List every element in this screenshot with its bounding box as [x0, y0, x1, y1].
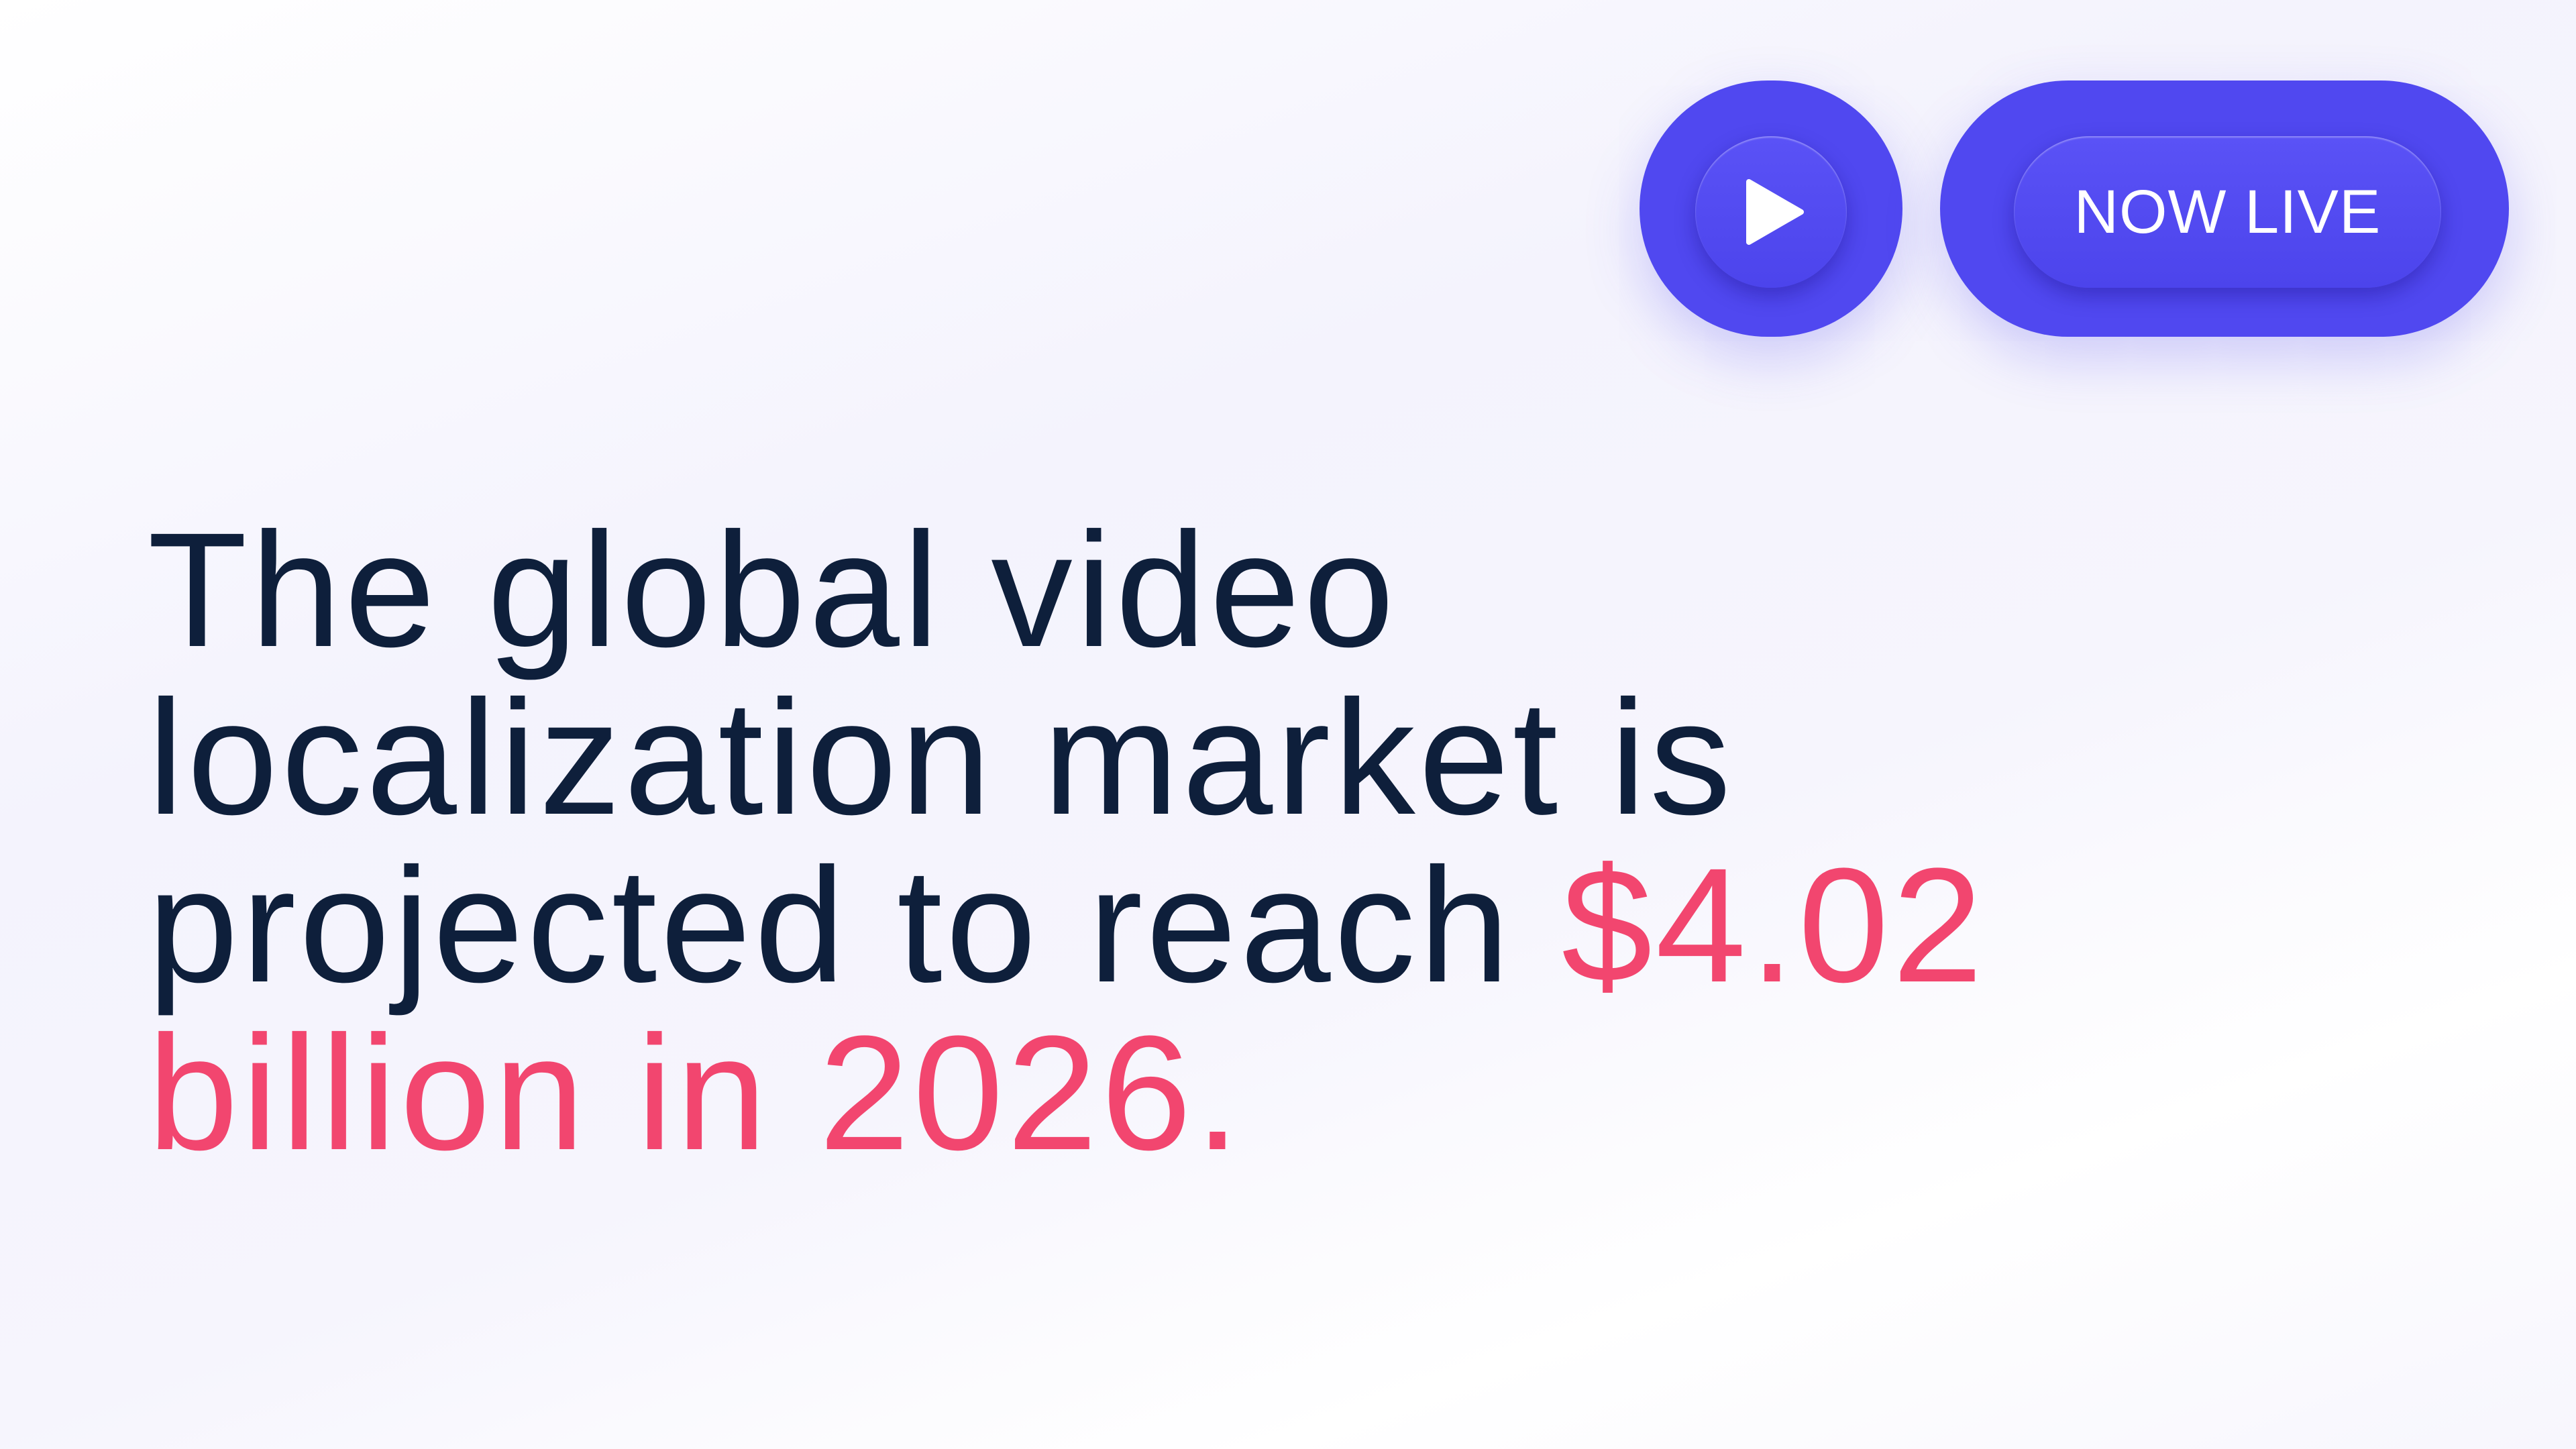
play button [1640, 80, 1902, 337]
headline text: projected to reach $4.02 [148, 835, 1986, 1016]
now live badge [1940, 80, 2509, 337]
play button inner circle [1695, 136, 1847, 288]
headline text [148, 499, 1986, 1184]
now live inner pill with text: NOW LIVE [2074, 178, 2381, 246]
headline text: billion in 2026. [148, 1002, 1244, 1184]
icon: play triangle [1746, 179, 1804, 245]
now live inner pill with text [2014, 136, 2441, 288]
headline text: localization market is [148, 667, 1734, 849]
headline text: The global video [148, 499, 1397, 681]
